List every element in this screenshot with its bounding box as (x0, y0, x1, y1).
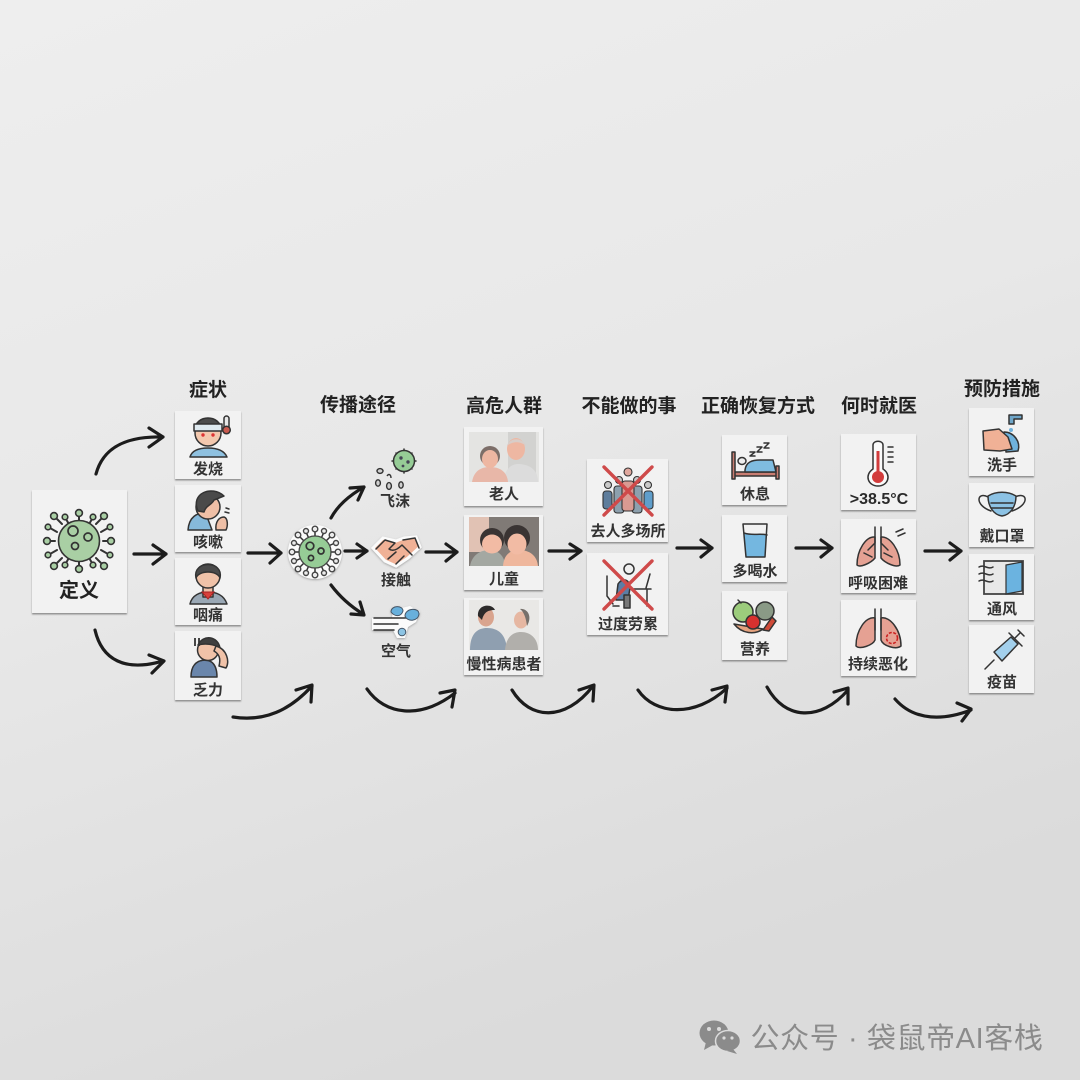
card: crowded places (587, 459, 668, 542)
card: nutrition (722, 591, 787, 660)
label: contact: 接触 (381, 572, 411, 589)
panel: definition (32, 490, 127, 613)
card: breathing difficulty (841, 519, 916, 593)
heading: high risk groups: 高危人群 (466, 394, 542, 417)
card: high temperature (841, 434, 916, 510)
heading: correct recovery: 正确恢复方式 (701, 394, 815, 417)
label: 营养 (740, 640, 770, 658)
label: 咽痛 (193, 606, 223, 624)
label: >38.5°C (850, 491, 909, 508)
card: elderly (464, 427, 543, 506)
arrow: definition to cough (134, 545, 166, 564)
label: 通风 (987, 601, 1017, 618)
label: 定义 (59, 578, 99, 602)
icon: lungs (857, 527, 905, 566)
arrow: to prevention (925, 543, 961, 560)
card: children (464, 515, 543, 590)
arrow: to contact (345, 544, 367, 558)
arrow: transmission to high risk (367, 689, 455, 711)
card: chronic patients (464, 598, 543, 675)
arrow: to central virus (248, 544, 281, 563)
card: ventilation (969, 554, 1034, 620)
arrow: to doctor (796, 540, 832, 557)
item: droplets (376, 449, 416, 510)
arrow: to air (331, 585, 364, 615)
label: 咳嗽 (193, 533, 223, 551)
icon: overwork crossed out (604, 561, 652, 609)
arrow: to droplets (331, 487, 364, 518)
arrow: symptoms to transmission (233, 685, 312, 718)
card: cough (175, 485, 241, 552)
icon: virus (44, 510, 114, 572)
arrow: recovery to doctor (767, 687, 848, 713)
icon: lungs with infection (856, 609, 901, 648)
heading: when to see a doctor: 何时就医 (841, 395, 917, 417)
watermark (700, 1020, 1043, 1055)
sticker: transmission virus (288, 525, 342, 579)
arrow: definition to fever (96, 428, 163, 474)
text: 公众号 · 袋鼠帝AI客栈 (751, 1022, 1043, 1055)
card: rest (722, 435, 787, 505)
heading: things not to do: 不能做的事 (581, 395, 677, 417)
label: 多喝水 (732, 562, 778, 580)
label: 飞沫 (380, 492, 410, 510)
arrow: don'ts to recovery (638, 686, 727, 710)
label: 老人 (489, 486, 519, 503)
label: 洗手 (987, 456, 1017, 474)
label: 呼吸困难 (848, 575, 908, 592)
heading: symptoms: 症状 (189, 379, 227, 401)
icon: glass (743, 524, 767, 557)
icon: thermometer (868, 441, 893, 486)
icon: syringe (985, 630, 1024, 669)
label: 戴口罩 (979, 527, 1025, 545)
label: 去人多场所 (590, 522, 666, 540)
label: 持续恶化 (848, 655, 908, 673)
heading: transmission routes: 传播途径 (320, 393, 396, 416)
arrow: definition to fatigue (95, 630, 164, 673)
arrow: to recovery (677, 540, 712, 557)
card: drink water (722, 515, 787, 582)
card: vaccine (969, 625, 1034, 693)
card: worsening (841, 600, 916, 676)
icon: hand washing (983, 415, 1022, 452)
arrow: high risk to don'ts (512, 685, 594, 713)
card: sore throat (175, 558, 241, 625)
label: 发烧 (193, 460, 223, 478)
arrow: to don'ts (549, 544, 581, 559)
photo: children (469, 517, 539, 566)
card: wash hands (969, 408, 1034, 476)
icon: face mask (979, 492, 1025, 516)
label: 儿童 (489, 570, 519, 588)
photo: elderly couple (469, 432, 539, 482)
icon: crowd crossed out (603, 467, 653, 515)
icon: open window (979, 561, 1023, 594)
photo: chronic patients (469, 600, 539, 650)
card: fatigue (175, 631, 241, 700)
item: air (372, 606, 420, 638)
label: 休息 (740, 485, 770, 503)
arrow: to high risk (426, 544, 457, 561)
label: 慢性病患者 (466, 655, 542, 673)
heading: prevention: 预防措施 (964, 377, 1040, 400)
arrow: doctor to prevention (895, 699, 971, 721)
icon: food (733, 600, 776, 633)
label: 过度劳累 (598, 615, 658, 633)
card: overwork (587, 553, 668, 635)
item: contact (373, 537, 420, 566)
label: air: 空气 (381, 642, 411, 660)
card: fever (175, 411, 241, 479)
card: mask (969, 483, 1034, 547)
label: 疫苗 (987, 673, 1017, 691)
icon: wechat (700, 1020, 740, 1054)
icon: bed (732, 443, 779, 479)
label: 乏力 (193, 682, 223, 699)
